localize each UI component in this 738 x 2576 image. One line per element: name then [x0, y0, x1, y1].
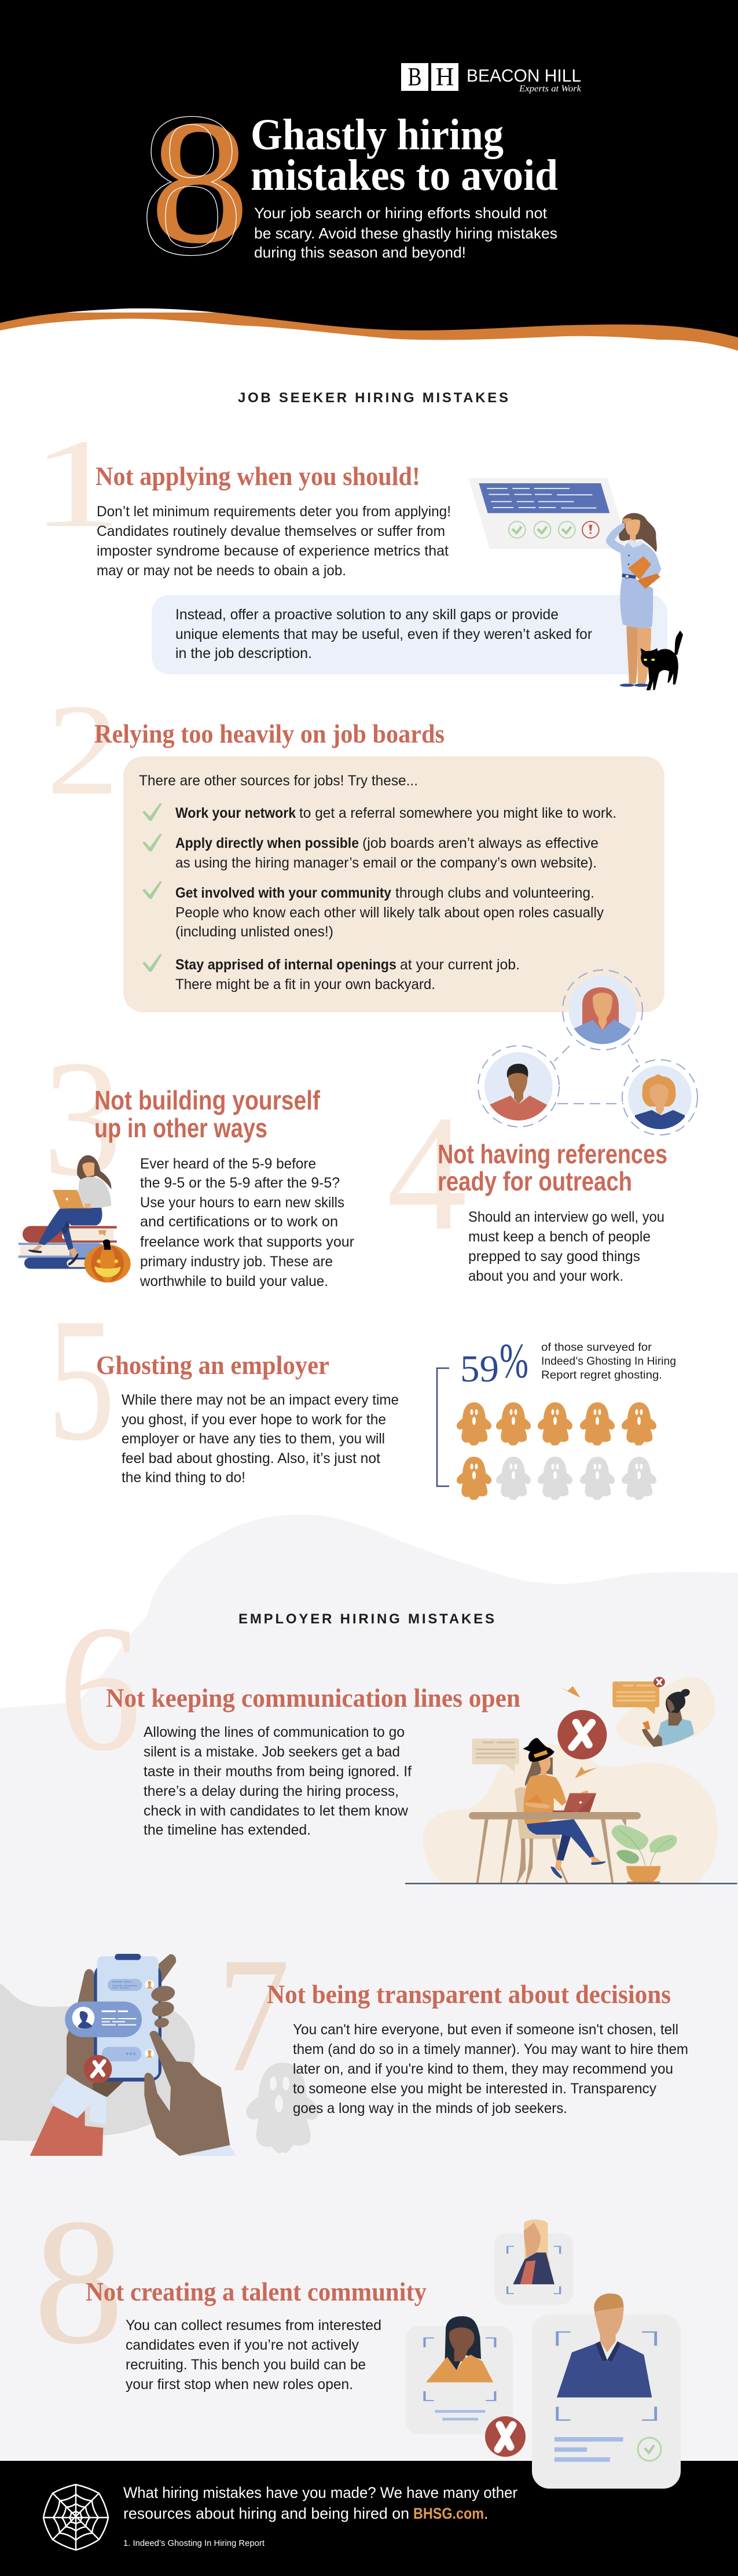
body 3 [139, 1156, 354, 1289]
table [476, 1820, 626, 1883]
body 1: imposter syndrome because of experience metrics that [97, 543, 449, 559]
card: rejected candidate [406, 2316, 526, 2457]
section 8 [34, 2182, 427, 2393]
body 7 [293, 2022, 688, 2116]
intro: There are other sources for jobs! Try these... [139, 773, 418, 789]
body 4: about you and your work. [468, 1268, 623, 1284]
plant [611, 1825, 677, 1883]
footer text: BHSG.com [413, 2505, 484, 2522]
title [251, 111, 558, 200]
body 5: you ghost, if you ever hope to work for the [122, 1412, 386, 1428]
tip: work your network: to get a referral somewhere you might like to work. [299, 805, 616, 821]
body 8: recruiting. This bench you build can be [126, 2357, 366, 2373]
section 5 [47, 1281, 676, 1500]
subtitle: be scary. Avoid these ghastly hiring mistakes [254, 225, 557, 242]
laptop [563, 1793, 596, 1812]
big X [557, 1710, 607, 1759]
logo [401, 63, 582, 94]
heading 5: Ghosting an employer [96, 1350, 329, 1380]
logo: B [407, 63, 421, 91]
heading 2: Relying too heavily on job boards [94, 719, 445, 748]
section 3 [19, 1026, 354, 1289]
big orange 8: 8 [139, 71, 244, 299]
chair [515, 1787, 560, 1839]
tip: stay apprised [142, 954, 520, 993]
body 4: must keep a bench of people [468, 1229, 651, 1245]
stat: 59 percent: Report regret ghosting. [541, 1369, 662, 1381]
illustration: witch at desk with chat [405, 1677, 737, 1884]
body 3: primary industry job. These are [140, 1254, 333, 1270]
stat: 59 percent: % [500, 1333, 528, 1388]
body 6 [144, 1724, 412, 1838]
tip: get involved: Get involved with your community [175, 885, 391, 901]
tip: get involved: (including unlisted ones!) [175, 924, 333, 940]
legs [556, 1829, 571, 1861]
body 4: Should an interview go well, you [468, 1209, 664, 1225]
section 6 [58, 1588, 737, 1884]
panel: other sources for jobs [123, 756, 664, 1012]
tip: get involved [142, 881, 604, 940]
body 1: Don’t let minimum requirements deter you from applying! [97, 504, 451, 520]
body 8: You can collect resumes from interested [126, 2317, 381, 2334]
illustration: woman checking requirements with black cat [468, 478, 683, 690]
ghost decoration [246, 2063, 319, 2153]
body 5: feel bad about ghosting. Also, it’s just not [122, 1450, 380, 1467]
tip: stay apprised: Stay apprised of internal openings [175, 957, 396, 973]
illustration: woman on books with pumpkin [19, 1155, 131, 1283]
section 4 [387, 1081, 667, 1284]
heading 6: Not keeping communication lines open [106, 1683, 520, 1713]
paper planes [557, 1686, 597, 1778]
body 8: your first stop when new roles open. [126, 2376, 353, 2393]
icon: spider web [43, 2485, 108, 2550]
body 3: the 9-5 or the 5-9 after the 9-5? [140, 1175, 340, 1191]
heading 4 [438, 1139, 667, 1196]
footer text: resources about hiring and being hired on [123, 2505, 409, 2522]
tip: apply directly: as using the hiring manager’s email or the company’s own website). [175, 855, 597, 871]
body 5: employer or have any ties to them, you will [122, 1431, 385, 1447]
body 4 [468, 1209, 664, 1284]
body 3: Use your hours to earn new skills [140, 1195, 344, 1211]
numeral 2: 2 [46, 677, 119, 822]
body 5: the kind thing to do! [122, 1469, 245, 1486]
beige chat bubble [472, 1739, 519, 1772]
big orange 8: 8 [150, 84, 249, 279]
section 2 [46, 677, 664, 1012]
numeral 6: 6 [58, 1588, 141, 1788]
heading: employer hiring mistakes: EMPLOYER HIRING MISTAKES [238, 1611, 494, 1627]
numeral 5: 5 [47, 1281, 115, 1477]
body 7: goes a long way in the minds of job seekers. [293, 2100, 567, 2116]
tip: stay apprised: at your current job. [400, 957, 520, 973]
body 7: later on, and if you're kind to them, they may recommend you [293, 2061, 673, 2077]
body 8: candidates even if you’re not actively [126, 2337, 359, 2353]
callout: instead: unique elements that may be useful, even if they weren’t asked for [175, 626, 592, 642]
heading 3: Not building yourself [94, 1085, 321, 1115]
callout: instead: Instead, offer a proactive solution to any skill gaps or provide [175, 607, 559, 623]
body 3: Ever heard of the 5-9 before [140, 1156, 316, 1172]
card: blonde woman [494, 2219, 573, 2305]
orange chat bubble [612, 1677, 665, 1714]
tip: apply directly: (job boards aren’t always as effective [362, 835, 599, 851]
subtitle: during this season and beyond! [254, 244, 466, 261]
numeral 4: 4 [387, 1081, 467, 1265]
tip: apply directly: Apply directly when possible [175, 835, 359, 851]
numeral 8: 8 [34, 2182, 124, 2382]
section 7 [0, 1923, 688, 2156]
body 1 [97, 504, 451, 579]
numeral 1: 1 [31, 413, 123, 554]
light grey employer background shape [0, 1515, 738, 2465]
stat: 59 percent: 59 [460, 1348, 499, 1390]
logo: Experts at Work [519, 84, 582, 94]
body 6: check in with candidates to let them know [144, 1803, 409, 1819]
tip: stay apprised: There might be a fit in your own backyard. [175, 976, 435, 993]
avatar: woman red hair [568, 976, 637, 1048]
body 4: prepped to say good things [468, 1248, 640, 1265]
header band [0, 0, 738, 351]
body 6: Allowing the lines of communication to go [144, 1724, 405, 1740]
body 7: to someone else you might be interested in. Transparency [293, 2081, 656, 2097]
heading 3: up in other ways [94, 1113, 267, 1143]
numeral 7: 7 [217, 1923, 290, 2106]
heading 8: Not creating a talent community [86, 2277, 427, 2306]
body 5 [122, 1392, 399, 1486]
heading 3 [94, 1085, 321, 1143]
stat: 59 percent: of those surveyed for [541, 1342, 652, 1354]
body 7: You can't hire everyone, but even if someone isn't chosen, tell [293, 2022, 678, 2038]
illustration: hands holding phone [0, 1954, 236, 2156]
heading 4: ready for outreach [438, 1166, 632, 1196]
callout: instead: in the job description. [175, 645, 312, 662]
body 6: there’s a delay during the hiring process, [144, 1783, 399, 1799]
body 7: them (and do so in a timely manner). You may want to hire them [293, 2041, 688, 2057]
seeker figure [642, 1689, 694, 1747]
avatar: curly blonde [628, 1065, 692, 1131]
body 6: the timeline has extended. [144, 1822, 311, 1838]
body 1: may or may not be needs to obain a job. [97, 563, 346, 579]
footer text [123, 2484, 517, 2522]
avatar: man dark hair [484, 1052, 553, 1123]
logo: BEACON HILL [467, 65, 581, 86]
numeral 3: 3 [43, 1026, 122, 1211]
heading 4: Not having references [438, 1139, 667, 1169]
heading 1: Not applying when you should! [96, 461, 420, 491]
card: selected candidate [532, 2294, 681, 2489]
body 6: taste in their mouths from being ignored. If [144, 1763, 412, 1780]
footer band [0, 2461, 738, 2576]
body 3: freelance work that supports your [140, 1234, 354, 1250]
stat: 59 percent [437, 1333, 676, 1500]
footer text: What hiring mistakes have you made? We have many other [123, 2484, 517, 2501]
body 5: While there may not be an impact every time [122, 1392, 399, 1408]
body 3: worthwhile to build your value. [139, 1273, 328, 1289]
body 1: Candidates routinely devalue themselves or suffer from [97, 523, 445, 539]
footer text: . [484, 2505, 489, 2522]
title: mistakes to avoid [251, 151, 558, 200]
tip: get involved: through clubs and volunteering. [395, 885, 594, 901]
heading 7: Not being transparent about decisions [267, 1979, 671, 2009]
logo: H [435, 63, 454, 91]
body 6: silent is a mistake. Job seekers get a bad [144, 1744, 400, 1760]
illustration: talent community profile cards [406, 2219, 681, 2489]
heading: job seeker hiring mistakes: JOB SEEKER HIRING MISTAKES [238, 390, 508, 406]
subtitle [254, 204, 557, 261]
tip: apply directly [142, 834, 599, 871]
stat: 59 percent: Indeed’s Ghosting In Hiring [541, 1355, 676, 1368]
title: Ghastly hiring [251, 111, 504, 159]
section 1 [31, 413, 683, 690]
subtitle: Your job search or hiring efforts should not [254, 204, 548, 222]
body 3: and certifications or to work on [140, 1214, 338, 1230]
reference network illustration [478, 970, 697, 1135]
witch [525, 1758, 553, 1787]
footnote: 1. Indeed’s Ghosting In Hiring Report [123, 2538, 265, 2548]
floor line [405, 1883, 737, 1884]
tip: work your network: Work your network [175, 805, 296, 821]
pictogram: ghosts [457, 1402, 656, 1500]
tip: work your network [142, 803, 616, 821]
tip: get involved: People who know each other will likely talk about open roles casually [175, 905, 604, 921]
body 8 [126, 2317, 381, 2393]
callout: instead [152, 595, 667, 674]
